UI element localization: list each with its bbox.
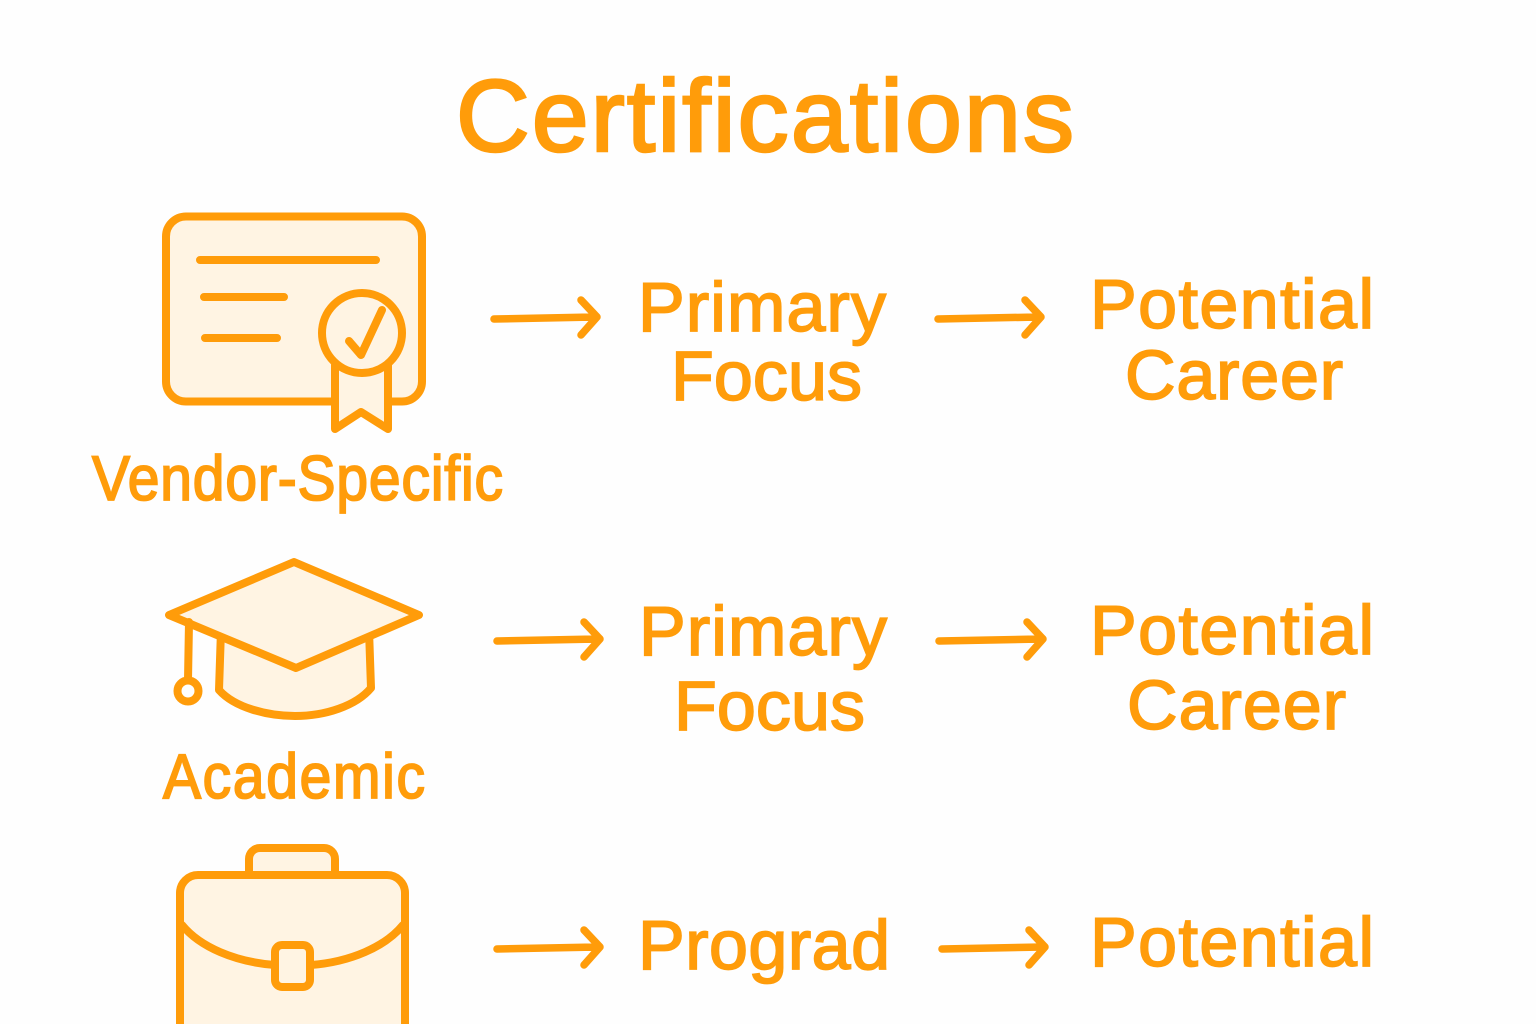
arrow: to potential career [938,300,1041,335]
arrow: to primary focus [497,622,600,657]
text: Potential Career: Potential [1090,591,1374,669]
title: Certifications [456,59,1074,173]
icon: briefcase [180,848,405,1024]
arrow: to potential career [939,622,1043,657]
text: Primary Focus: Focus [671,337,862,415]
text: Potential Career: Career [1127,666,1346,744]
row: vendor-specific [92,216,1374,514]
text: Potential Career [1090,591,1374,744]
text: Primary Focus [638,268,886,415]
text: Primary Focus: Focus [674,667,865,745]
row: professional [180,848,1374,1024]
text: Primary Focus [639,592,887,745]
row: academic [163,562,1374,812]
text: Potential Career [1090,265,1374,414]
text: Prograd: Prograd [638,906,890,984]
label: Vendor-Specific: Vendor-Specific [92,443,503,514]
arrow: to prograd [497,930,600,965]
text: Potential: Potential [1090,903,1374,981]
arrow: to potential [942,930,1045,965]
icon: certificate with seal and ribbon [166,216,422,429]
label: Academic: Academic [163,741,425,812]
text: Potential Career: Career [1125,336,1343,414]
arrow: to primary focus [494,300,597,335]
text: Primary Focus: Primary [638,268,886,346]
text: Potential Career: Potential [1090,265,1374,343]
text: Primary Focus: Primary [639,592,887,670]
icon: graduation cap [169,562,419,716]
